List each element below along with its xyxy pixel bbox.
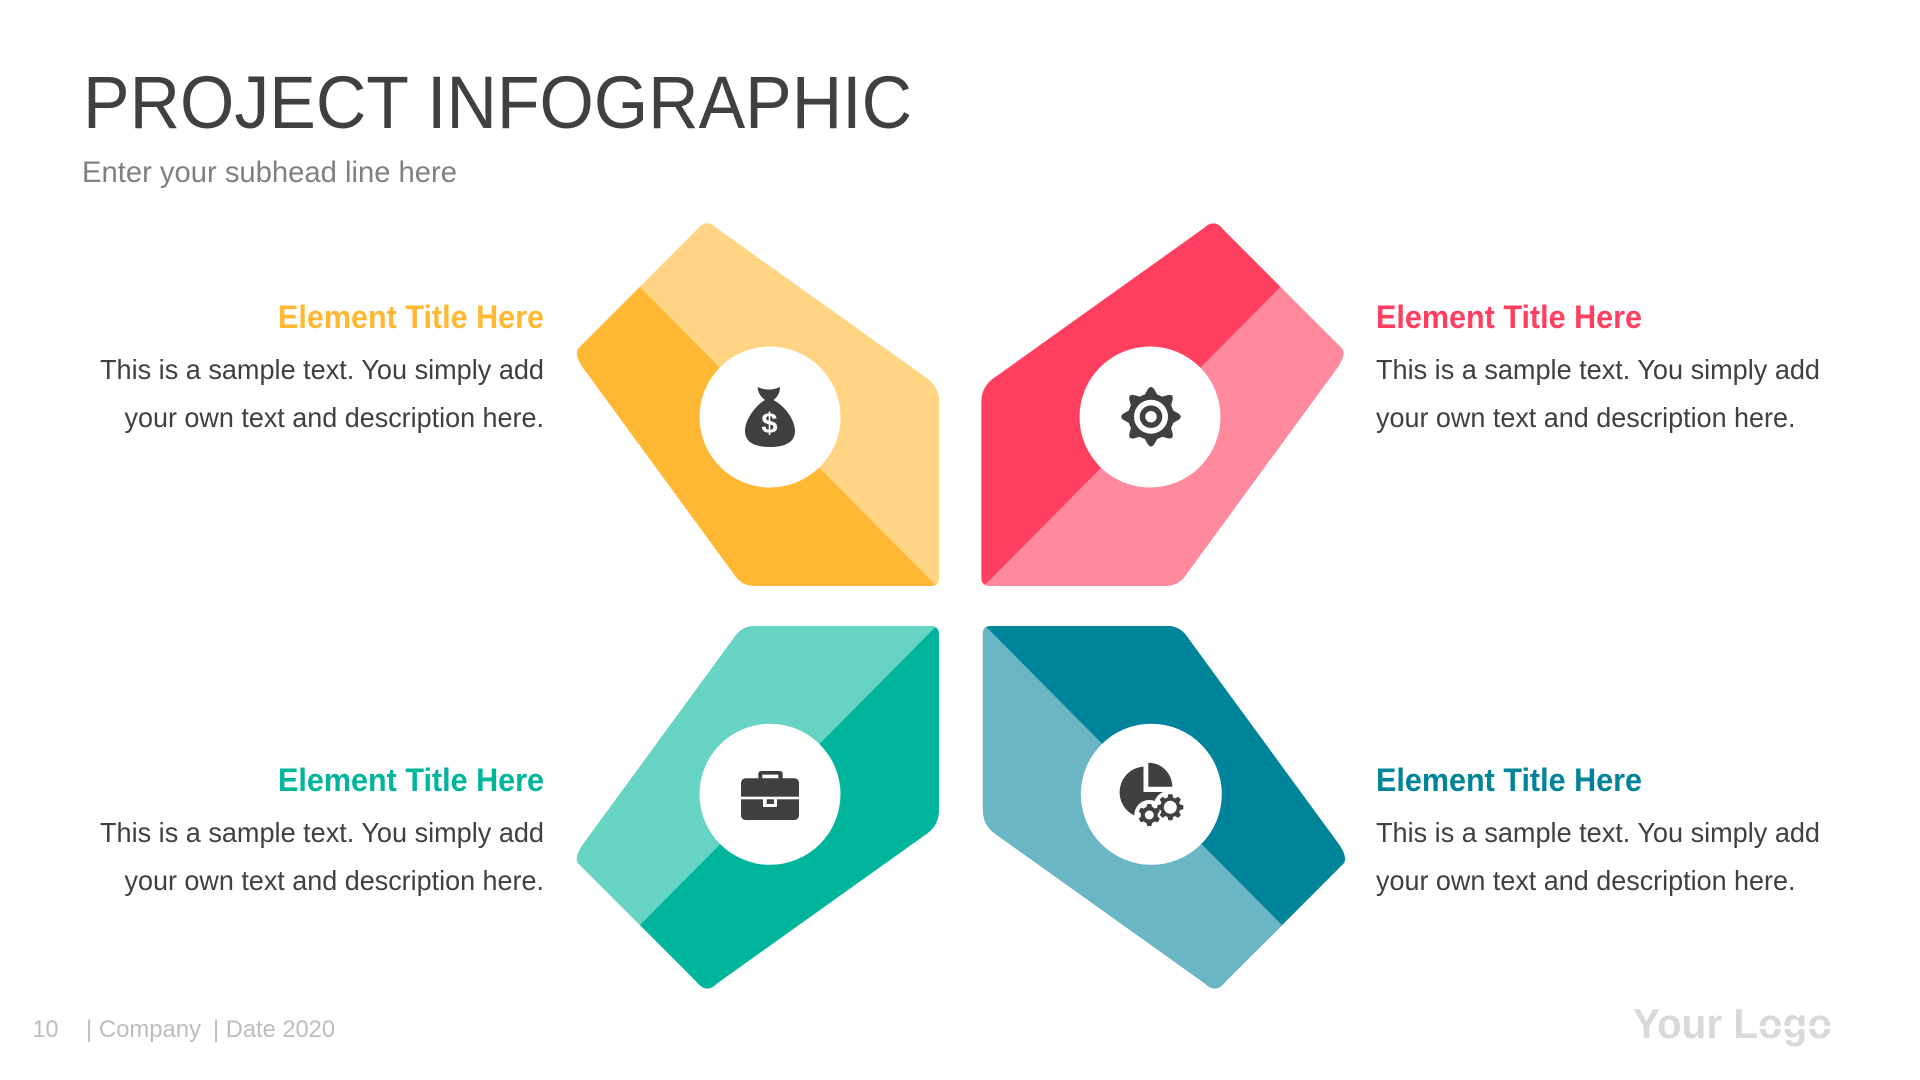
icon: pie chart with gears <box>1120 763 1187 830</box>
petal light part <box>640 223 939 584</box>
body text <box>1376 817 1820 896</box>
icon: money bag <box>745 387 795 447</box>
petal shape <box>981 223 1344 586</box>
body text <box>100 817 544 896</box>
icon circle <box>1081 724 1222 865</box>
body text: This is a sample text. You simply add <box>100 817 544 848</box>
panel: yellow petal <box>577 223 939 586</box>
petal shape <box>577 626 939 989</box>
subhead: Enter your subhead line here <box>82 156 457 189</box>
element title: Element Title Here <box>1376 299 1642 335</box>
footer: | Date 2020 <box>213 1016 335 1043</box>
footer: 10 <box>32 1016 58 1043</box>
icon: briefcase <box>741 771 799 820</box>
petal dark part <box>577 223 939 586</box>
body text: This is a sample text. You simply add <box>1376 354 1820 385</box>
body text: This is a sample text. You simply add <box>1376 817 1820 848</box>
title: PROJECT INFOGRAPHIC <box>83 61 912 144</box>
panel: red petal <box>981 223 1344 586</box>
body text: This is a sample text. You simply add <box>100 354 544 385</box>
text block: red element <box>1376 299 1820 433</box>
element title: Element Title Here <box>278 299 544 335</box>
body text <box>1376 354 1820 433</box>
element title: Element Title Here <box>278 762 544 798</box>
logo: Your Logo <box>1633 1000 1832 1047</box>
body text: your own text and description here. <box>1376 402 1796 433</box>
body text <box>100 354 544 433</box>
panel: blue petal <box>983 626 1345 989</box>
footer: | Company <box>86 1016 201 1043</box>
text block: blue element <box>1376 762 1820 896</box>
text block: teal element <box>100 762 544 896</box>
petal shape <box>983 626 1345 989</box>
element title: Element Title Here <box>1376 762 1642 798</box>
body text: your own text and description here. <box>124 865 544 896</box>
panel: teal petal <box>577 626 939 989</box>
body text: your own text and description here. <box>124 402 544 433</box>
icon: gear <box>1121 387 1181 446</box>
icon circle <box>1080 346 1220 488</box>
body text: your own text and description here. <box>1376 865 1796 896</box>
text block: yellow element <box>100 299 544 433</box>
icon: money bag: $ <box>761 408 778 440</box>
icon circle <box>700 346 840 488</box>
footer <box>32 1016 335 1043</box>
icon circle <box>700 724 840 865</box>
